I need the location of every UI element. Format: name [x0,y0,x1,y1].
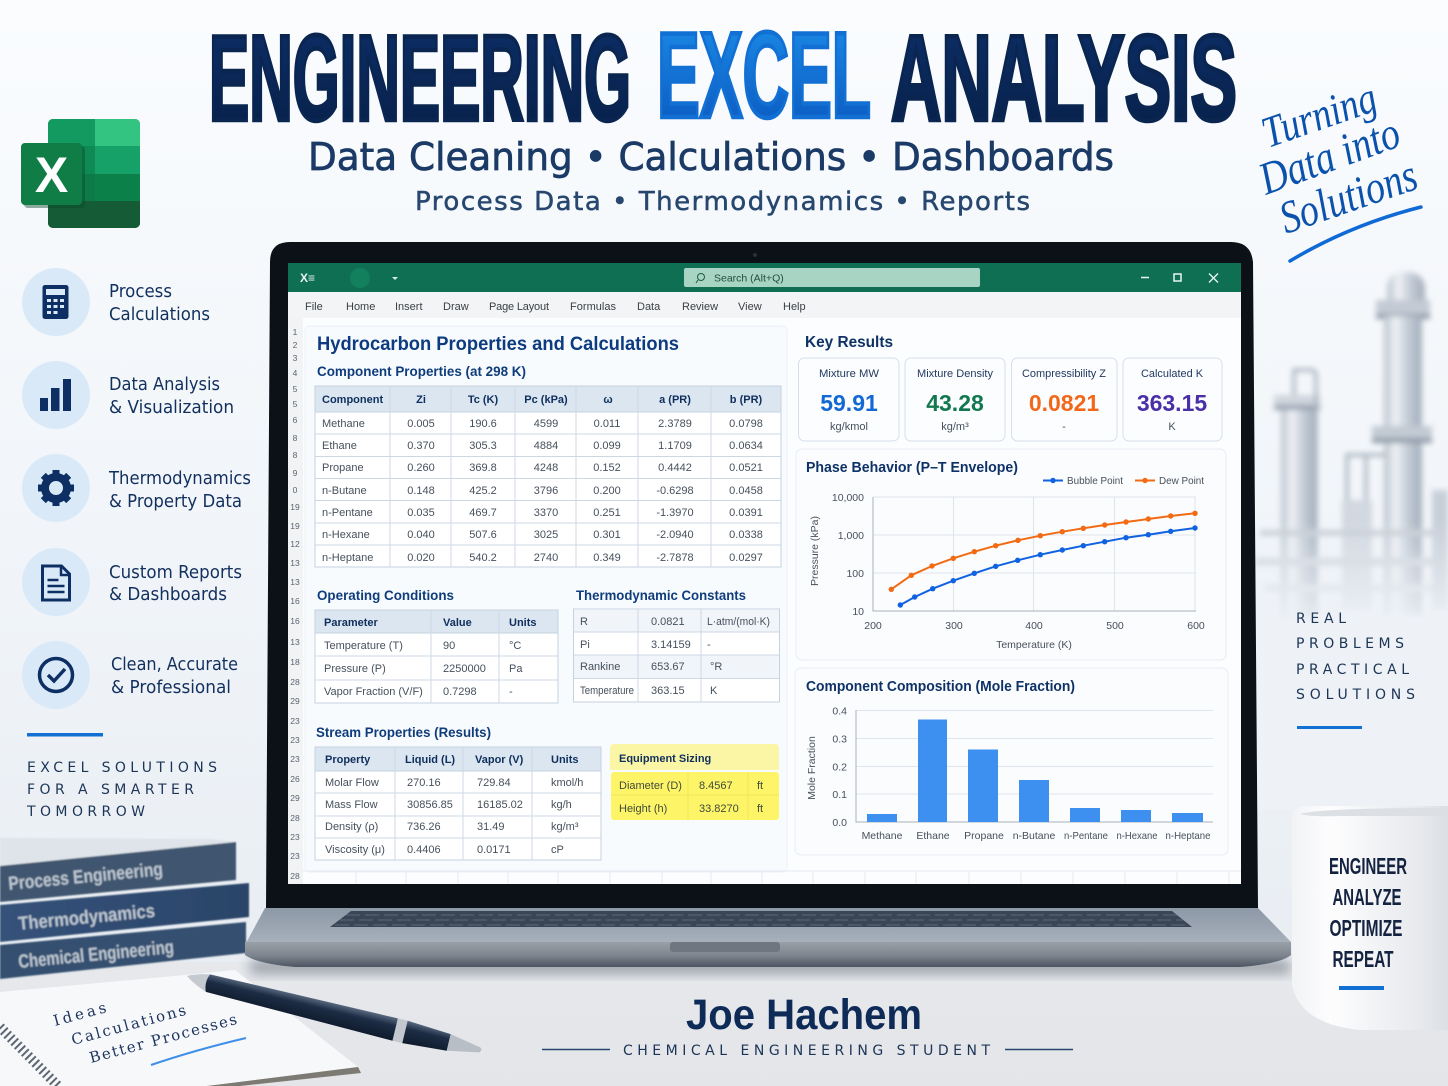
table: stream properties: 30856.85 [407,799,453,811]
laptop shadow [250,960,1290,974]
table: component properties: -2.7878 [656,552,694,564]
pen [183,968,484,1061]
table: component properties: 3370 [534,507,558,519]
chart: component composition: n-Heptane [1166,830,1211,842]
chart: component composition: 0.1 [832,789,847,801]
handwritten tagline: Turning [1255,73,1383,157]
feature: reports [22,548,242,616]
row numbers: 19 [290,521,300,531]
table: component properties: -0.6298 [656,485,694,497]
mug: ENGINEER [1329,853,1407,879]
table: thermodynamic constants: 363.15 [651,685,685,697]
chart: phase behavior [796,449,1226,660]
chart: phase behavior: 10,000 [832,492,864,504]
chart: phase behavior: 500 [1106,620,1124,632]
chart: component composition: n-Pentane [1064,830,1108,842]
table: component properties: 425.2 [469,485,497,497]
table: component properties: 0.0634 [729,440,763,452]
table: component properties: 0.370 [407,440,435,452]
row numbers: 29 [290,793,300,803]
table: component properties: 2740 [534,552,558,564]
books [0,838,249,979]
table: operating conditions: Temperature (T) [324,640,403,652]
table: component properties: 4599 [534,418,558,430]
table: stream properties: Units [551,754,578,766]
ribbon menu: Formulas [570,301,616,313]
table: component properties: 0.148 [407,485,435,497]
title: EXCEL [657,7,871,143]
feature: quality [22,641,238,709]
table: stream properties: kg/h [551,799,572,811]
row numbers: 5 [293,399,298,409]
table: component properties: 0.152 [593,462,621,474]
chart: component composition: Component Composition (Mole Fraction) [806,679,1075,695]
table: stream properties: cP [551,844,564,856]
sheet title: Hydrocarbon Properties and Calculations [317,334,679,355]
table: operating conditions: Value [443,617,472,629]
table: component properties: Tc (K) [468,394,499,406]
card: mixture density: kg/m³ [941,421,969,433]
feature: data analysis [22,361,234,429]
table: stream properties: 31.49 [477,821,505,833]
feature: quality: Clean, Accurate [111,654,238,675]
operating conditions heading: Operating Conditions [317,587,454,603]
card: mixture density: Mixture Density [917,368,994,380]
feature: thermodynamics [22,454,251,522]
feature: process calculations: Calculations [109,304,210,325]
row numbers: 9 [293,468,298,478]
ribbon menu: Help [783,301,806,313]
table: component properties: 4248 [534,462,558,474]
icon: Excel logo: X [35,147,68,203]
table: component properties: Ethane [322,440,357,452]
table: component properties: 0.251 [593,507,621,519]
excel title bar: Search (Alt+Q) [714,272,784,284]
table: component properties: 0.4442 [658,462,692,474]
row numbers: 0 [293,485,298,495]
card: calculated K: 363.15 [1137,390,1207,416]
row numbers: 13 [290,558,300,568]
chart: component composition: Mole Fraction [806,736,818,800]
subtitle line two: Process Data • Thermodynamics • Reports [415,187,1030,217]
equipment sizing box: Equipment Sizing [619,753,711,765]
table: thermodynamic constants: °R [710,661,722,673]
equipment sizing box: Height (h) [619,803,667,815]
notebook: Better Processes [87,1010,239,1067]
table: component properties: Methane [322,418,365,430]
table: stream properties: 16185.02 [477,799,523,811]
row numbers: 3 [293,353,298,363]
chart: component composition: 0.0 [832,817,847,829]
table: operating conditions: 0.7298 [443,686,477,698]
table: stream properties: Property [325,754,371,766]
equipment sizing box [610,744,779,820]
table: component properties [315,386,781,567]
screen [288,263,1241,884]
table: thermodynamic constants: L·atm/(mol·K) [707,616,770,628]
feature: data analysis: & Visualization [109,397,234,418]
books: Chemical Engineering [17,937,175,973]
author role: CHEMICAL ENGINEERING STUDENT [623,1043,990,1059]
equipment sizing box: ft [757,803,763,815]
table: component properties: 3025 [534,529,558,541]
table: component properties: b (PR) [730,394,763,406]
table: thermodynamic constants [574,609,780,702]
feature: thermodynamics: Thermodynamics [108,468,251,489]
table: component properties: 0.0297 [729,552,763,564]
table: stream properties: Liquid (L) [405,754,455,766]
chart: component composition: n-Butane [1013,830,1055,842]
notebook: Ideas [51,999,108,1030]
table: component properties: 0.0458 [729,485,763,497]
left tagline [26,733,217,820]
ribbon menu: Data [637,301,661,313]
row numbers: 28 [290,871,300,881]
table: operating conditions: 2250000 [443,663,486,675]
chart: component composition: Propane [964,830,1004,842]
refinery fog [1245,520,1448,630]
left tagline: TOMORROW [26,804,145,820]
table: component properties: n-Hexane [322,529,370,541]
table: operating conditions: Parameter [324,617,379,629]
table: component properties: Zi [416,394,426,406]
table: stream properties: Density (ρ) [325,821,378,833]
chart: phase behavior: 300 [945,620,963,632]
card: calculated K [1123,358,1222,441]
row numbers: 13 [290,577,300,587]
row numbers: 16 [290,616,300,626]
mug: REPEAT [1332,946,1394,972]
table: thermodynamic constants: 0.0821 [651,616,685,628]
table: thermodynamic constants: Pi [580,639,590,651]
feature: data analysis: Data Analysis [109,374,220,395]
right tagline: SOLUTIONS [1296,687,1415,703]
row numbers: 19 [290,502,300,512]
feature: quality: & Professional [111,677,231,698]
row numbers: 2 [293,340,298,350]
chart: component composition [795,668,1228,855]
chart: phase behavior: Bubble Point [1067,475,1123,487]
handwritten tagline: Solutions [1273,149,1424,243]
ribbon menu: Page Layout [489,301,549,313]
table: component properties: 3796 [534,485,558,497]
chart: phase behavior: 600 [1187,620,1205,632]
table: component properties: n-Heptane [322,552,373,564]
ribbon menu: Insert [395,301,423,313]
handwritten tagline: Data into [1251,107,1407,205]
table: operating conditions: - [509,686,513,698]
mug: OPTIMIZE [1330,915,1402,941]
table: thermodynamic constants: 653.67 [651,661,685,673]
table: thermodynamic constants: R [580,616,588,628]
right tagline: REAL [1296,611,1346,627]
row numbers: 8 [293,433,298,443]
table: thermodynamic constants: Temperature [580,685,634,697]
table: thermodynamic constants: 3.14159 [651,639,691,651]
books: Thermodynamics [17,901,156,935]
card: mixture MW [798,358,899,441]
table: component properties: n-Pentane [322,507,373,519]
table: component properties: 0.040 [407,529,435,541]
card: compressibility: Compressibility Z [1022,368,1106,380]
row numbers: 29 [290,696,300,706]
feature: reports: Custom Reports [109,562,242,583]
table: component properties: 0.011 [594,418,620,430]
chart: component composition: 0.3 [832,734,847,746]
chart: component composition: 0.2 [832,762,847,774]
table: operating conditions: Pa [509,663,523,675]
row numbers: 8 [293,450,298,460]
feature: process calculations: Process [109,281,172,302]
stream properties heading: Stream Properties (Results) [316,724,491,740]
table: stream properties: 270.16 [407,777,441,789]
chart: phase behavior: 1,000 [838,530,864,542]
table: thermodynamic constants: K [710,685,718,697]
table: thermodynamic constants: - [707,639,711,651]
key results heading: Key Results [805,334,893,351]
table: stream properties: Vapor (V) [475,754,524,766]
left tagline: EXCEL SOLUTIONS [27,760,217,776]
table: operating conditions: Units [509,617,536,629]
table: stream properties: Mass Flow [325,799,378,811]
table: component properties: -1.3970 [656,507,694,519]
excel title bar: X≡ [300,271,315,285]
card: compressibility: 0.0821 [1029,390,1099,416]
ribbon menu: View [738,301,762,313]
table: component properties: 540.2 [469,552,497,564]
table: component properties: 469.7 [469,507,497,519]
feature: reports: & Dashboards [109,584,227,605]
table: component properties: 0.0798 [729,418,763,430]
right tagline [1296,611,1415,729]
row numbers: 23 [290,735,300,745]
card: calculated K: Calculated K [1141,368,1204,380]
chart: phase behavior: 10 [852,606,864,618]
table: operating conditions: Pressure (P) [324,663,386,675]
table: component properties: 1.1709 [658,440,692,452]
table: component properties: a (PR) [659,394,691,406]
table: operating conditions: 90 [443,640,455,652]
chart: phase behavior: Dew Point [1159,475,1204,487]
table: stream properties: kg/m³ [551,821,579,833]
row numbers: 1 [293,327,298,337]
table: operating conditions: Vapor Fraction (V/F) [324,686,423,698]
table: component properties: ω [603,394,613,406]
row numbers: 6 [293,415,298,425]
equipment sizing box: ft [757,780,763,792]
title: ENGINEERING [209,10,631,146]
row numbers: 13 [290,637,300,647]
equipment sizing box: 8.4567 [699,780,733,792]
table: component properties: 0.020 [407,552,435,564]
chart: phase behavior: 200 [864,620,882,632]
table: component properties: 190.6 [469,418,497,430]
row numbers: 18 [290,657,300,667]
handwritten tagline [1251,73,1424,261]
table: component properties: Propane [322,462,364,474]
laptop [245,242,1291,967]
table: stream properties [315,747,601,860]
card: mixture density: 43.28 [926,390,984,416]
row numbers: 5 [293,384,298,394]
refinery backdrop [1255,272,1448,620]
table: stream properties: 736.26 [407,821,441,833]
table: component properties: 0.005 [407,418,435,430]
table: component properties: 0.260 [407,462,435,474]
table: component properties: 0.349 [593,552,621,564]
chart: phase behavior: Temperature (K) [996,639,1072,651]
chart: phase behavior: Pressure (kPa) [809,516,821,586]
chart: phase behavior: 100 [846,568,864,580]
table: component properties: 305.3 [469,440,497,452]
row numbers: 16 [290,596,300,606]
table: component properties: Pc (kPa) [524,394,568,406]
table: component properties: 369.8 [469,462,497,474]
table: thermodynamic constants: Rankine [580,661,620,673]
left tagline: FOR A SMARTER [27,782,194,798]
mug [1292,806,1448,1030]
chart: component composition: Methane [862,830,903,842]
thermodynamic constants heading: Thermodynamic Constants [576,587,746,603]
table: component properties: 0.0521 [729,462,763,474]
mug: ANALYZE [1332,884,1402,910]
right tagline: PROBLEMS [1296,636,1404,652]
table: component properties: 0.099 [593,440,621,452]
chart: phase behavior: Phase Behavior (P–T Envelope) [806,460,1018,476]
desk surface [0,962,1448,1086]
row numbers: 23 [290,716,300,726]
table: component properties: 507.6 [469,529,497,541]
row numbers: 23 [290,754,300,764]
ribbon menu [288,292,1241,318]
feature: thermodynamics: & Property Data [109,491,242,512]
row numbers: 23 [290,851,300,861]
component properties heading: Component Properties (at 298 K) [317,363,526,379]
ribbon menu: Review [682,301,718,313]
left worksheet panel [305,326,787,872]
table: component properties: 4884 [534,440,558,452]
row numbers: 26 [290,774,300,784]
author name: Joe Hachem [686,991,922,1039]
excel title bar [288,263,1241,292]
table: component properties: 2.3789 [658,418,692,430]
table: stream properties: 0.4406 [407,844,441,856]
table: component properties: 0.301 [593,529,621,541]
row numbers: 28 [290,813,300,823]
table: component properties: 0.200 [593,485,621,497]
card: compressibility: - [1062,421,1066,433]
table: component properties: Component [322,394,383,406]
table: stream properties: Viscosity (μ) [325,844,385,856]
card: calculated K: K [1168,421,1176,433]
books: Process Engineering [7,859,164,895]
right tagline: PRACTICAL [1296,662,1409,678]
chart: component composition: 0.4 [832,706,847,718]
notebook [0,970,361,1086]
row numbers: 28 [290,677,300,687]
equipment sizing box: 33.8270 [699,803,739,815]
chart: phase behavior: 400 [1025,620,1043,632]
ribbon menu: File [305,301,323,313]
chart: component composition: n-Hexane [1116,830,1158,842]
table: component properties: -2.0940 [656,529,694,541]
card: mixture density [905,358,1005,441]
row numbers: 23 [290,832,300,842]
table: stream properties: kmol/h [551,777,583,789]
ribbon menu: Home [346,301,375,313]
table: component properties: 0.0391 [729,507,763,519]
row numbers: 12 [290,539,300,549]
table: component properties: 0.0338 [729,529,763,541]
subtitle line one: Data Cleaning • Calculations • Dashboards [308,135,1114,179]
feature: process calculations [22,268,210,336]
row numbers: 4 [293,368,298,378]
row numbers [288,318,303,884]
icon: Excel logo [21,119,140,228]
card: mixture MW: 59.91 [820,390,878,416]
table: stream properties: Molar Flow [325,777,379,789]
ribbon menu: Draw [443,301,469,313]
table: operating conditions [315,610,558,703]
card: compressibility [1012,358,1117,441]
table: operating conditions: °C [509,640,521,652]
table: component properties: 0.035 [407,507,435,519]
notebook: Calculations [69,1001,188,1049]
card: mixture MW: Mixture MW [819,368,880,380]
chart: component composition: Ethane [916,830,950,842]
table: stream properties: 729.84 [477,777,511,789]
table: component properties: n-Butane [322,485,367,497]
card: mixture MW: kg/kmol [830,421,868,433]
table: stream properties: 0.0171 [477,844,511,856]
equipment sizing box: Diameter (D) [619,780,682,792]
